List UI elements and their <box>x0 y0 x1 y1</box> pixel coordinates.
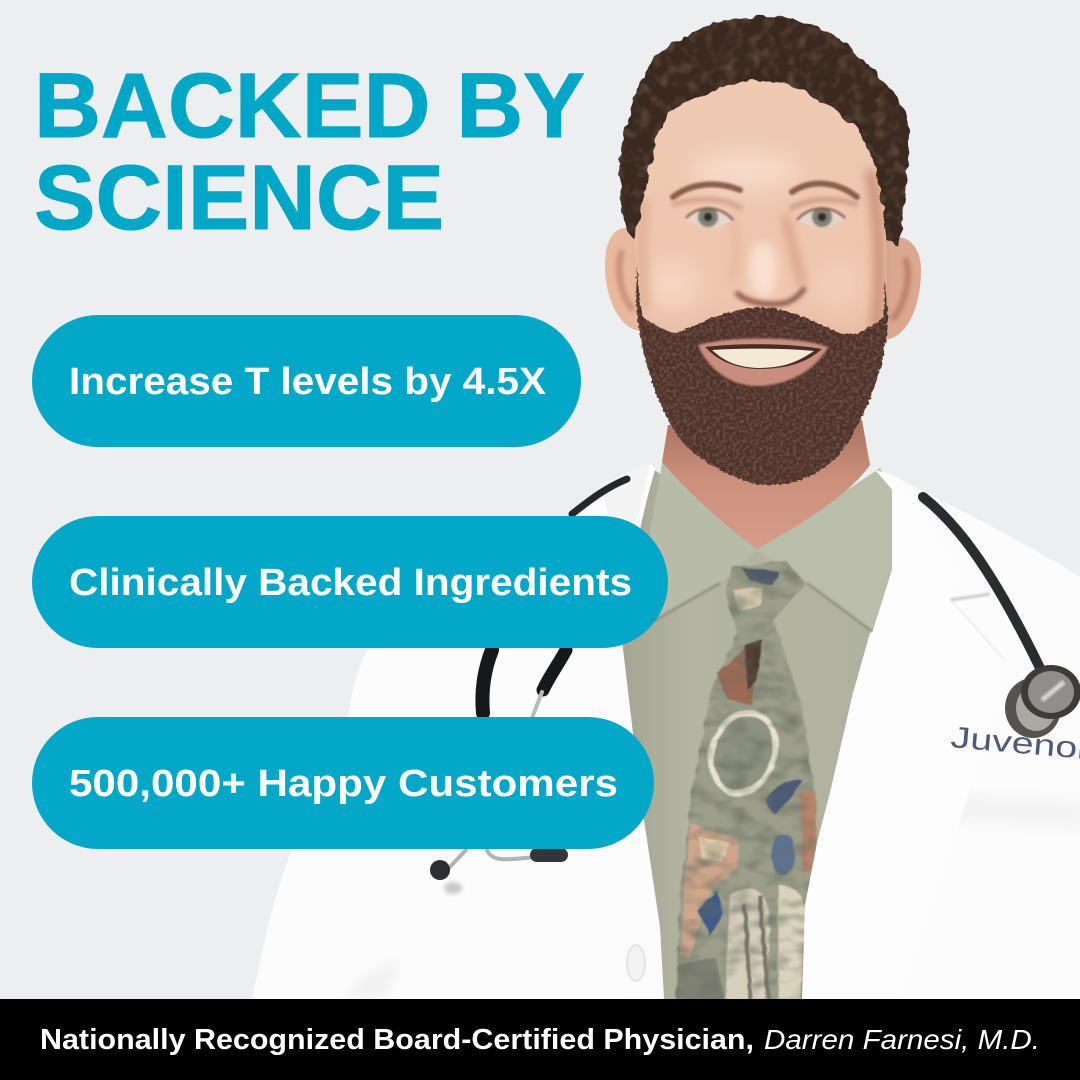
eyebrows <box>673 184 857 197</box>
shirt collar <box>640 458 892 632</box>
footer bar: Nationally Recognized Board-Certified Physician, <box>40 1024 754 1056</box>
pill: T levels: Increase T levels by 4.5X <box>69 361 547 403</box>
title <box>34 55 585 249</box>
title: BACKED BY <box>34 55 585 157</box>
right eye <box>797 207 845 227</box>
stethoscope chest piece <box>1005 665 1080 738</box>
coat logo text: Juvenor <box>949 721 1080 766</box>
necktie <box>676 560 817 1000</box>
footer bar: Darren Farnesi, M.D. <box>764 1024 1040 1055</box>
coat shading <box>348 463 1080 999</box>
mouth <box>698 338 828 386</box>
hair <box>620 16 908 245</box>
title: SCIENCE <box>34 147 444 249</box>
stethoscope: neck tubes <box>572 479 627 514</box>
pill: ingredients <box>32 516 668 648</box>
shirt <box>622 470 892 999</box>
ears <box>605 228 921 340</box>
coat lapels <box>590 470 1003 999</box>
pill: T levels <box>32 315 581 447</box>
pill: customers: 500,000+ Happy Customers <box>69 763 618 805</box>
left eye <box>686 207 733 227</box>
eyes <box>686 207 845 227</box>
pill: ingredients: Clinically Backed Ingredients <box>69 562 632 604</box>
beard <box>636 265 888 485</box>
footer bar <box>0 999 1080 1080</box>
pill: customers <box>32 717 654 849</box>
face shading <box>642 152 879 330</box>
face <box>633 74 887 440</box>
stethoscope <box>430 479 1040 894</box>
lab coat <box>252 463 1080 999</box>
neck <box>662 420 870 549</box>
